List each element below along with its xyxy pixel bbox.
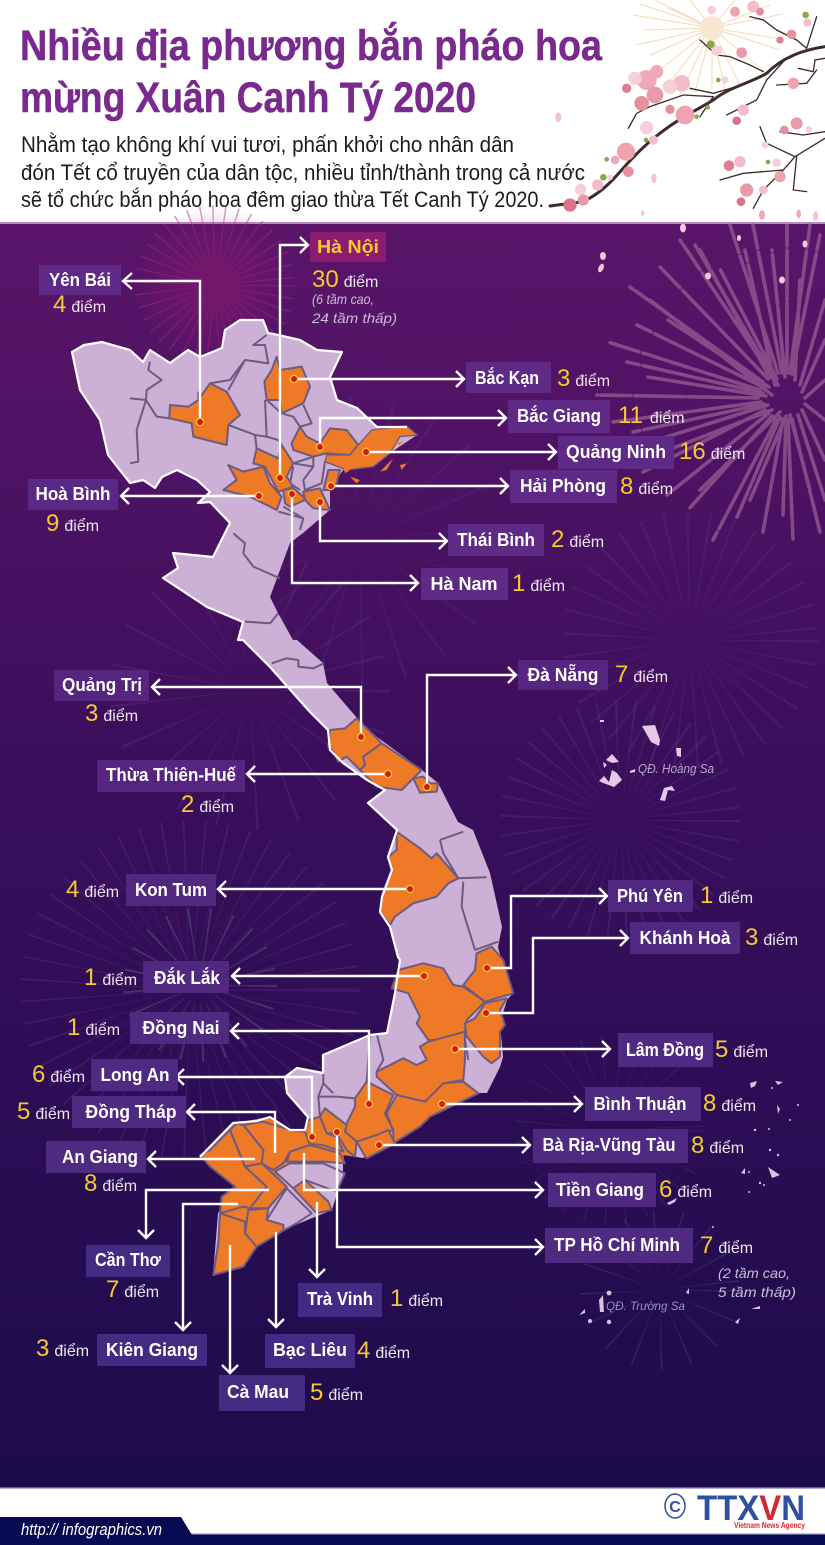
logo: TTXVN: TTXVN <box>697 1489 805 1528</box>
label: Quảng Ninh 16 điểm: Quảng Ninh <box>566 442 666 462</box>
label: Kon Tum 4 điểm: 4 điểm <box>66 876 119 903</box>
province: Quảng Trị <box>328 718 382 770</box>
province: Hoà Bình <box>223 465 282 510</box>
label: Hoà Bình 9 điểm <box>28 479 118 537</box>
label: Tiền Giang 6 điểm: 6 điểm <box>659 1176 712 1203</box>
label: Đắk Lắk 1 điểm: 1 điểm <box>84 964 137 991</box>
label: Đồng Nai 1 điểm <box>67 1012 229 1044</box>
source url: http:// infographics.vn <box>21 1520 162 1539</box>
label: Hoà Bình 9 điểm: 9 điểm <box>46 510 99 537</box>
label: Trà Vinh 1 điểm: 1 điểm <box>390 1285 443 1312</box>
arrow: Trà Vinh <box>309 1202 325 1277</box>
label: TP Hồ Chí Minh 7 điểm: TP Hồ Chí Minh <box>554 1235 680 1255</box>
intro text <box>21 132 585 212</box>
province: Tiền Giang <box>287 1145 345 1163</box>
label: Hải Phòng 8 điểm <box>510 470 673 503</box>
label: Hà Nam 1 điểm <box>421 568 565 600</box>
label: Cần Thơ 7 điểm: Cần Thơ <box>95 1250 161 1270</box>
label: Hà Nam 1 điểm: Hà Nam <box>430 574 498 594</box>
label: Lâm Đồng 5 điểm: 5 điểm <box>715 1036 768 1063</box>
province: Cà Mau <box>213 1213 257 1275</box>
label: Tiền Giang 6 điểm: Tiền Giang <box>556 1180 644 1200</box>
label: Hà Nội 30 điểm: Hà Nội <box>317 237 379 257</box>
label: Bạc Liêu 4 điểm <box>265 1334 410 1368</box>
label: Yên Bái 4 điểm <box>39 265 121 318</box>
label: Phú Yên 1 điểm <box>608 880 753 912</box>
title: mừng Xuân Canh Tý 2020 <box>20 74 476 122</box>
province: Phú Yên <box>463 947 513 1002</box>
label: Đồng Tháp 5 điểm: Đồng Tháp <box>86 1102 177 1122</box>
arrow: Lâm Đồng <box>455 1041 610 1057</box>
arrow: Bắc Giang <box>320 410 506 447</box>
white land border <box>72 320 407 1157</box>
province: Cần Thơ <box>245 1163 287 1208</box>
label: Đồng Nai 1 điểm: Đồng Nai <box>142 1018 220 1038</box>
arrow: Bình Thuận <box>442 1096 582 1112</box>
label: Kiên Giang 3 điểm: 3 điểm <box>36 1335 89 1362</box>
label: Bà Rịa-Vũng Tàu 8 điểm: Bà Rịa-Vũng Tàu <box>542 1135 676 1155</box>
label: Kiên Giang 3 điểm: Kiên Giang <box>106 1340 198 1360</box>
label: Bạc Liêu 4 điểm: 4 điểm <box>357 1337 410 1364</box>
province: Ben Tre area (lavender) <box>275 1163 345 1192</box>
base country shape <box>72 320 513 1275</box>
arrow: Kon Tum <box>218 881 410 897</box>
arrow: Phú Yên <box>487 888 607 968</box>
label: TP Hồ Chí Minh 7 điểm <box>545 1228 796 1300</box>
label: Bạc Liêu 4 điểm: Bạc Liêu <box>273 1340 347 1360</box>
delta underlay <box>200 1117 357 1275</box>
islands: Trường Sa <box>579 1081 799 1324</box>
label: Khánh Hoà 3 điểm <box>630 922 798 954</box>
province: Bắc Kạn <box>264 357 310 413</box>
label: Đà Nẵng 7 điểm: Đà Nẵng <box>528 663 598 685</box>
label: Cà Mau 5 điểm <box>219 1375 363 1411</box>
province: Đồng Tháp <box>243 1122 310 1170</box>
label: Bình Thuận 8 điểm <box>585 1087 756 1121</box>
map: Vietnam <box>72 320 513 1275</box>
label: Long An 6 điểm <box>32 1059 178 1091</box>
arrow: Đắk Lắk <box>232 968 424 984</box>
province: Soc Trang (lavender) <box>267 1188 312 1231</box>
label: Bình Thuận 8 điểm: 8 điểm <box>703 1090 756 1117</box>
province: Thừa Thiên-Huế <box>360 743 422 790</box>
label: QĐ. Trường Sa: QĐ. Trường Sa <box>606 1299 685 1313</box>
arrow: Đồng Nai <box>231 1023 369 1104</box>
arrow: Quảng Ninh <box>366 444 556 460</box>
intro text: Nhằm tạo không khí vui tươi, phấn khởi cho nhân dân <box>21 132 514 157</box>
label: Thừa Thiên-Huế 2 điểm: Thừa Thiên-Huế <box>106 765 237 785</box>
label: Đồng Tháp 5 điểm <box>17 1096 186 1128</box>
label: Long An 6 điểm: 6 điểm <box>32 1061 85 1088</box>
arrow: Tiền Giang <box>304 1153 543 1198</box>
intro text: sẽ tổ chức bắn pháo hoa đêm giao thừa Tết Canh Tý 2020. <box>21 187 544 212</box>
arrow: Bắc Kạn <box>294 371 464 387</box>
label: TP Hồ Chí Minh 7 điểm: 7 điểm <box>700 1232 753 1259</box>
arrow: Hà Nội <box>280 237 308 478</box>
province: Bắc Giang <box>292 427 358 457</box>
province: Yên Bái <box>169 383 240 445</box>
province: Kon Tum <box>380 832 458 925</box>
label: Thừa Thiên-Huế 2 điểm: 2 điểm <box>181 791 234 818</box>
label: Thái Bình 2 điểm: Thái Bình <box>457 530 535 550</box>
label: Quảng Trị 3 điểm: 3 điểm <box>85 700 138 727</box>
label: Đắk Lắk 1 điểm: Đắk Lắk <box>154 967 221 988</box>
highlighted provinces: centre <box>328 718 458 925</box>
label: Thái Bình 2 điểm <box>448 524 604 556</box>
province borders: north <box>130 335 325 623</box>
label: Bắc Giang 11 điểm: Bắc Giang <box>517 405 601 426</box>
label: Khánh Hoà 3 điểm: Khánh Hoà <box>640 928 731 948</box>
arrow: Cần Thơ <box>138 1190 269 1238</box>
province: Đà Nẵng <box>413 777 438 793</box>
arrow: Long An <box>176 1069 312 1137</box>
province: Quảng Ninh <box>325 426 417 470</box>
label: Hà Nội 30 điểm <box>310 232 397 326</box>
label: Bắc Giang 11 điểm <box>508 400 685 433</box>
label: Hà Nội 30 điểm: 30 điểm <box>312 266 378 293</box>
province: Hà Nội <box>253 445 293 492</box>
label: Phú Yên 1 điểm: 1 điểm <box>700 882 753 909</box>
logo: TTXVN: Vietnam News Agency <box>734 1521 805 1530</box>
label: Bà Rịa-Vũng Tàu 8 điểm: 8 điểm <box>691 1132 744 1159</box>
label: Đồng Tháp 5 điểm: 5 điểm <box>17 1098 70 1125</box>
province: Khánh Hoà <box>465 998 507 1063</box>
label: QĐ. Hoàng Sa: QĐ. Hoàng Sa <box>638 762 714 776</box>
label: Quảng Trị 3 điểm <box>54 670 149 727</box>
province: Bà Rịa-Vũng Tàu <box>357 1130 395 1158</box>
arrow: Hà Nam <box>292 494 418 591</box>
arrow: Bạc Liêu <box>268 1232 284 1327</box>
province: Bạc Liêu <box>245 1208 283 1247</box>
province: Long An <box>290 1117 343 1152</box>
province: Kiên Giang <box>200 1130 267 1213</box>
label: Đà Nẵng 7 điểm: 7 điểm <box>615 661 668 688</box>
label: Cà Mau 5 điểm: Cà Mau <box>227 1382 289 1402</box>
province: Trà Vinh <box>293 1180 332 1213</box>
decoration: petals over fireworks <box>597 224 808 284</box>
label: Tiền Giang 6 điểm <box>548 1173 712 1207</box>
location dots <box>196 375 491 1149</box>
arrow: Hải Phòng <box>331 478 508 494</box>
label: Lâm Đồng 5 điểm: Lâm Đồng <box>626 1040 704 1060</box>
label: An Giang 8 điểm <box>46 1141 146 1197</box>
arrows and location dots <box>121 237 628 1373</box>
label: Kon Tum 4 điểm <box>66 874 216 906</box>
label: Bắc Kạn 3 điểm <box>466 362 610 393</box>
label: Hà Nam 1 điểm: 1 điểm <box>512 570 565 597</box>
logo: TTXVN: C <box>669 1499 681 1516</box>
label: Bắc Kạn 3 điểm: Bắc Kạn <box>475 367 539 388</box>
label: Long An 6 điểm: Long An <box>100 1065 170 1085</box>
label: Hoà Bình 9 điểm: Hoà Bình <box>36 484 110 504</box>
label: Bắc Kạn 3 điểm: 3 điểm <box>557 365 610 392</box>
title <box>20 21 603 122</box>
label: Quảng Trị 3 điểm: Quảng Trị <box>62 675 142 695</box>
province: Lâm Đồng <box>377 1032 465 1103</box>
label: Cà Mau 5 điểm: 5 điểm <box>310 1379 363 1406</box>
decoration: cherry blossom branch with burst <box>550 0 825 221</box>
label: Bắc Giang 11 điểm: 11 điểm <box>618 402 685 429</box>
label: Cần Thơ 7 điểm <box>86 1245 170 1303</box>
province: Thái Bình <box>303 488 330 510</box>
label: Yên Bái 4 điểm: 4 điểm <box>53 291 106 318</box>
arrow: Cà Mau <box>222 1245 238 1373</box>
label: Bà Rịa-Vũng Tàu 8 điểm <box>533 1129 744 1163</box>
label: Quảng Ninh 16 điểm <box>558 436 745 469</box>
label: Trà Vinh 1 điểm <box>298 1283 443 1317</box>
arrow: Khánh Hoà <box>486 930 628 1013</box>
label: Trà Vinh 1 điểm: Trà Vinh <box>307 1289 373 1309</box>
label: Khánh Hoà 3 điểm: 3 điểm <box>745 924 798 951</box>
province: Hải Phòng <box>323 470 340 490</box>
label: Đồng Nai 1 điểm: 1 điểm <box>67 1014 120 1041</box>
islands: Hoàng Sa <box>599 720 681 801</box>
label: Kiên Giang 3 điểm <box>36 1334 207 1366</box>
arrow: TP Hồ Chí Minh <box>337 1132 543 1255</box>
province borders: centre <box>272 658 498 950</box>
highlighted provinces: north <box>169 357 417 510</box>
label: TP Hồ Chí Minh 7 điểm: 5 tầm thấp) <box>718 1284 796 1300</box>
label: Phú Yên 1 điểm: Phú Yên <box>617 886 683 906</box>
label: Yên Bái 4 điểm: Yên Bái <box>49 270 111 290</box>
label: Quảng Ninh 16 điểm: 16 điểm <box>679 438 745 465</box>
label: Hà Nội 30 điểm: (6 tầm cao, <box>312 291 374 307</box>
arrow: Quảng Trị <box>152 679 361 737</box>
arrow: Đà Nẵng <box>427 667 516 787</box>
label: Hà Nội 30 điểm: 24 tầm thấp) <box>311 310 397 326</box>
label: An Giang 8 điểm: An Giang <box>62 1147 138 1167</box>
header background <box>0 0 825 223</box>
borders: southern highlands <box>318 1033 468 1117</box>
label: Đà Nẵng 7 điểm <box>518 660 668 690</box>
arrow: Thừa Thiên-Huế <box>247 766 388 782</box>
label: An Giang 8 điểm: 8 điểm <box>84 1170 137 1197</box>
label: Kon Tum 4 điểm: Kon Tum <box>135 880 207 900</box>
province: Đắk Lắk <box>392 963 485 1040</box>
province: Bình Thuận <box>387 1082 478 1143</box>
province: Đồng Nai <box>345 1082 393 1142</box>
province: An Giang <box>230 1123 263 1167</box>
title: Nhiều địa phương bắn pháo hoa <box>20 21 603 70</box>
label: TP Hồ Chí Minh 7 điểm: (2 tầm cao, <box>718 1265 790 1281</box>
highlighted provinces: south <box>200 947 513 1275</box>
label: Thái Bình 2 điểm: 2 điểm <box>551 526 604 553</box>
label: Cần Thơ 7 điểm: 7 điểm <box>106 1276 159 1303</box>
arrow: Yên Bái <box>123 273 200 422</box>
firework: large burst top right <box>597 225 825 540</box>
intro text: đón Tết cổ truyền của dân tộc, nhiều tỉnh/thành trong cả nước <box>21 160 585 185</box>
footer band <box>0 1487 825 1545</box>
label: Lâm Đồng 5 điểm <box>618 1033 768 1067</box>
label: Thừa Thiên-Huế 2 điểm <box>97 760 245 818</box>
arrow: Bà Rịa-Vũng Tàu <box>379 1137 530 1153</box>
arrow: An Giang <box>148 1151 255 1167</box>
label: Hải Phòng 8 điểm: Hải Phòng <box>520 476 606 496</box>
province: TP Hồ Chí Minh <box>320 1108 357 1157</box>
arrow: Đồng Tháp <box>187 1104 275 1153</box>
label: Bình Thuận 8 điểm: Bình Thuận <box>594 1094 686 1114</box>
province: Hà Nam <box>283 488 305 507</box>
arrow: Hoà Bình <box>121 488 259 504</box>
islands: Quảng Ninh <box>343 442 407 483</box>
arrow: Thái Bình <box>320 502 447 549</box>
label: Hải Phòng 8 điểm: 8 điểm <box>620 473 673 500</box>
label: Đắk Lắk 1 điểm <box>84 961 229 993</box>
arrow: Kiên Giang <box>175 1204 238 1330</box>
